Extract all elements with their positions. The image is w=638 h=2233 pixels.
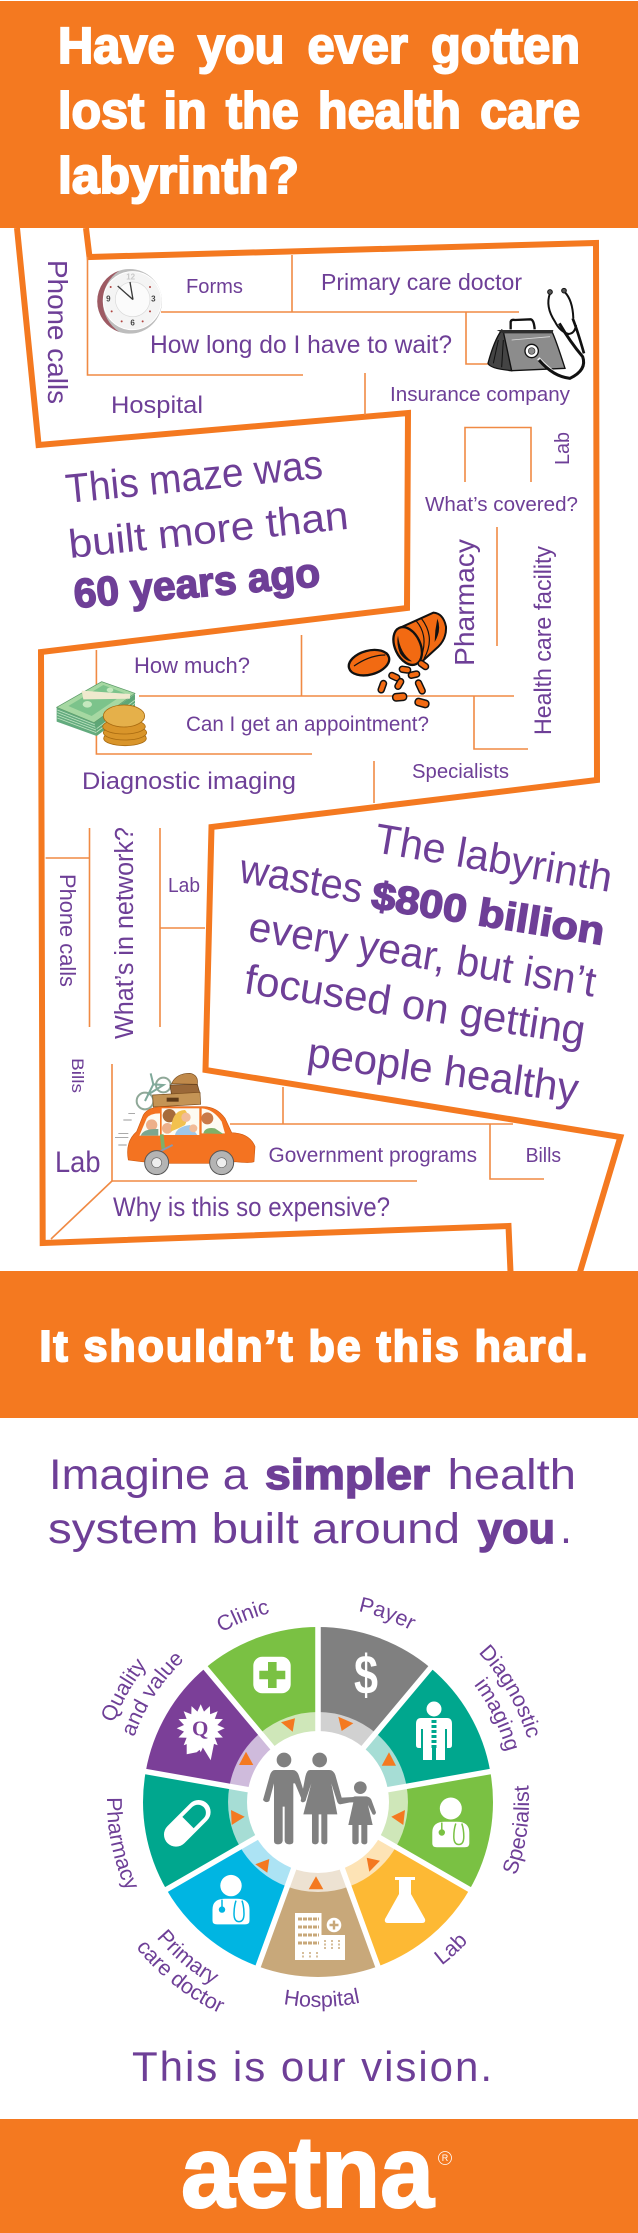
icon: clinic cross: [253, 1657, 291, 1693]
callout: 60 years ago: built more than: [66, 494, 350, 567]
heading: Imagine a simpler health system: you: [478, 1505, 555, 1553]
callout: 800 billion wasted: every year, but isn’t: [246, 902, 600, 1006]
heading: Imagine a simpler health system: [48, 1451, 576, 1553]
heading: Imagine a simpler health system: simpler: [265, 1451, 430, 1499]
icon: car with family and luggage: [115, 1073, 255, 1175]
callout: 800 billion wasted: focused on getting: [242, 955, 589, 1054]
icon: flask: [385, 1877, 425, 1923]
maze label: Forms: Forms: [186, 276, 243, 298]
callout: 800 billion wasted: $800 billion: [369, 874, 607, 954]
icon: specialist doctor: [432, 1798, 469, 1847]
label: Diagnostic imaging: Diagnostic: [480, 1644, 538, 1738]
wheel light ring: [228, 1712, 408, 1892]
woman: [301, 1753, 354, 1844]
title: labyrinth?: [58, 147, 299, 204]
chart: health system wheel: [102, 1597, 538, 2012]
icon: clock: 3: [151, 295, 156, 304]
label: Primary care doctor: Primary: [158, 1929, 219, 1985]
heading: Imagine a simpler health system: health: [448, 1451, 576, 1499]
panel: middle orange banner: [0, 1271, 638, 1418]
maze label: Government programs: Government programs: [268, 1143, 477, 1167]
man: [263, 1753, 306, 1844]
icon: x-ray figure: [416, 1702, 452, 1760]
icon: dollar sign: $: [354, 1643, 378, 1706]
callout: 800 billion wasted: people healthy: [305, 1028, 582, 1112]
maze label: Lab: Lab: [552, 432, 574, 465]
maze label: Primary care doctor: Primary care doctor: [321, 269, 522, 295]
icon: hospital building: [295, 1913, 345, 1960]
wheel labels: [102, 1597, 538, 2012]
label: Primary care doctor: care doctor: [138, 1942, 224, 2012]
text: This is our vision: This is our vision.: [132, 2043, 492, 2090]
heading: Imagine a simpler health system: .: [560, 1505, 572, 1553]
icon: large pill: [346, 646, 392, 680]
maze outer walls: [17, 228, 620, 1272]
heading: Imagine a simpler health system: Imagine a: [49, 1451, 248, 1499]
logo: aetna: R: [442, 2153, 449, 2163]
maze label: Insurance company: Insurance company: [390, 383, 571, 406]
icon: pill bottle and pills: [346, 613, 446, 708]
icon: small pills: [377, 659, 430, 708]
icon: clock: [97, 269, 162, 334]
callout: 800 billion wasted: The labyrinth: [371, 815, 616, 901]
maze label: How long do I have to wait?: How long do I have to wait?: [150, 331, 452, 359]
maze label: Lab upper: Lab: [168, 875, 200, 897]
car body: [128, 1107, 255, 1163]
maze label: Why is this so expensive?: Why is this so expensive?: [113, 1192, 390, 1222]
panel: top orange banner: [0, 1, 638, 228]
icon: clock: 6: [130, 318, 135, 327]
maze label: Phone calls lower: Phone calls: [55, 874, 80, 987]
title: [58, 17, 580, 204]
maze label: Can I get an appointment?: Can I get an appointment?: [186, 712, 429, 736]
icon: bicycle: [137, 1073, 171, 1109]
car windows and passengers: [139, 1108, 225, 1151]
icon: clock: 9: [106, 295, 111, 304]
icon: capsule: [159, 1795, 216, 1852]
maze label: Specialists: Specialists: [412, 760, 509, 783]
maze label: Diagnostic imaging: Diagnostic imaging: [82, 768, 296, 795]
heading: It shouldn't be this hard: It shouldn’t be this hard.: [40, 1322, 590, 1371]
icon: cash and coins: [57, 682, 147, 746]
icon: primary care doctor: [212, 1875, 250, 1924]
label: Pharmacy: Pharmacy: [107, 1798, 138, 1888]
icon: doctor bag and stethoscope: [488, 288, 584, 378]
label: Quality and value: [102, 1654, 182, 1736]
maze label: Lab large: Lab: [55, 1146, 100, 1179]
car wheels: [145, 1151, 234, 1175]
maze label: Hospital: Hospital: [111, 392, 203, 419]
maze inner walls: [46, 255, 544, 1239]
maze label: Bills vertical: Bills: [68, 1058, 87, 1093]
label: Clinic: Clinic: [218, 1602, 269, 1630]
icon: family: [263, 1753, 376, 1844]
icon: luggage: [153, 1073, 201, 1107]
label: Lab: Lab: [434, 1936, 466, 1964]
title: lost in the health care: [58, 82, 580, 139]
label: Quality and value: Quality: [102, 1658, 146, 1720]
label: Quality and value: and value: [124, 1654, 182, 1736]
maze label: How much?: How much?: [134, 653, 250, 678]
maze label: Health care facility: Health care facility: [530, 546, 557, 735]
icon: quality badge: Q: [192, 1716, 208, 1740]
maze label: What's covered?: What’s covered?: [425, 493, 578, 516]
wheel segments: [143, 1627, 493, 1977]
girl: [348, 1781, 376, 1844]
callout: 60 years ago: 60 years ago: [72, 549, 322, 617]
panel: maze: [17, 228, 620, 1272]
label: Specialist: Specialist: [503, 1785, 530, 1874]
label: Diagnostic imaging: imaging: [474, 1676, 517, 1751]
callout: 60 years ago: This maze was: [63, 441, 325, 512]
maze label: Pharmacy: Pharmacy: [449, 539, 480, 666]
icon: quality badge: [177, 1704, 225, 1760]
maze label: Phone calls: Phone calls: [42, 260, 73, 404]
callout: 60 years ago: [63, 441, 350, 617]
callout: 800 billion wasted: [236, 815, 616, 1112]
callout: 800 billion wasted: wastes: [236, 844, 367, 912]
icon: pill bottle: [388, 613, 446, 669]
icon: clock: 12: [126, 272, 136, 281]
logo: aetna: aetna: [181, 2115, 435, 2229]
wheel arrows: [231, 1717, 405, 1889]
label: Hospital: Hospital: [285, 1988, 359, 2012]
maze label: Bills: Bills: [526, 1145, 561, 1167]
title: Have you ever gotten: [58, 17, 580, 74]
heading: Imagine a simpler health system: system built around: [48, 1505, 460, 1553]
maze label: What's in network?: What’s in network?: [111, 827, 139, 1039]
label: Payer: Payer: [360, 1597, 416, 1629]
panel: bottom orange banner: [0, 2115, 638, 2233]
